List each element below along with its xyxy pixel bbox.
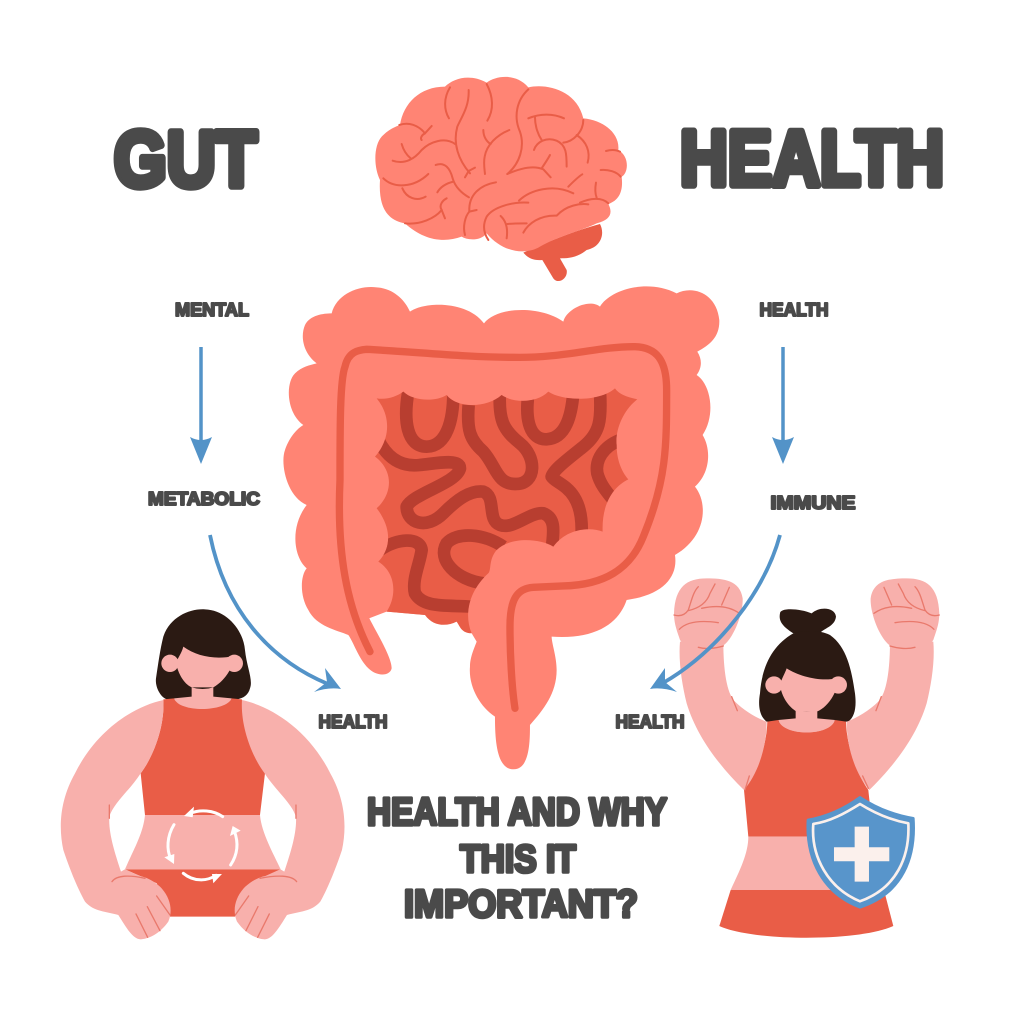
arrow: health to immune	[772, 347, 794, 464]
label: HEALTH top right: HEALTH	[760, 300, 828, 320]
question line 3: IMPORTANT?	[404, 883, 638, 926]
tank top	[141, 698, 265, 815]
neck	[174, 687, 232, 710]
hair bun	[780, 609, 836, 633]
skirt	[719, 890, 893, 938]
large intestine inner line	[339, 347, 667, 708]
small intestine coils	[378, 392, 620, 607]
right arm	[847, 642, 934, 790]
title: GUT: GUT	[114, 114, 257, 203]
shield inner line	[813, 804, 908, 901]
infographic canvas	[60, 76, 943, 940]
dress top	[744, 720, 873, 837]
label: MENTAL: MENTAL	[175, 300, 249, 320]
fist lines	[674, 584, 939, 790]
face	[780, 668, 837, 712]
finger lines	[109, 805, 297, 937]
title: HEALTH: HEALTH	[680, 114, 944, 202]
question text	[367, 791, 667, 926]
midriff	[125, 815, 281, 869]
brain: cerebellum and stem	[523, 224, 602, 281]
right arm	[235, 700, 345, 939]
arrow: immune to health	[650, 535, 780, 692]
brain: cerebrum	[375, 77, 627, 251]
ears	[161, 655, 243, 672]
icon: shield with cross	[808, 797, 914, 907]
brain: folds	[383, 84, 621, 240]
neck	[778, 710, 835, 732]
face	[176, 647, 234, 687]
label: HEALTH bottom left: HEALTH	[318, 712, 388, 732]
figure: woman with shield	[674, 578, 939, 938]
icon: brain	[375, 77, 627, 281]
large intestine outer shape	[283, 286, 719, 769]
label: IMMUNE: IMMUNE	[770, 493, 856, 513]
question line 2: THIS IT	[460, 838, 576, 881]
question line 1: HEALTH AND WHY	[367, 791, 667, 834]
shorts	[125, 869, 281, 917]
label: METABOLIC: METABOLIC	[148, 489, 260, 509]
dress band	[731, 837, 880, 890]
left arm	[61, 700, 171, 939]
arrow: metabolic to health	[210, 535, 341, 692]
ears	[765, 676, 847, 694]
cross	[834, 827, 889, 882]
label: HEALTH bottom right: HEALTH	[616, 712, 684, 732]
right fist	[871, 578, 939, 649]
left fist	[674, 578, 743, 649]
hair	[156, 609, 251, 699]
hair	[759, 631, 856, 722]
small intestine background	[375, 388, 637, 633]
figure: woman with metabolism icon	[61, 609, 345, 939]
metabolism cycle arrows	[168, 811, 237, 880]
shield body	[808, 797, 914, 907]
left arm	[680, 642, 767, 790]
icon: intestines	[283, 286, 719, 769]
arrow: mental to metabolic	[190, 347, 212, 464]
